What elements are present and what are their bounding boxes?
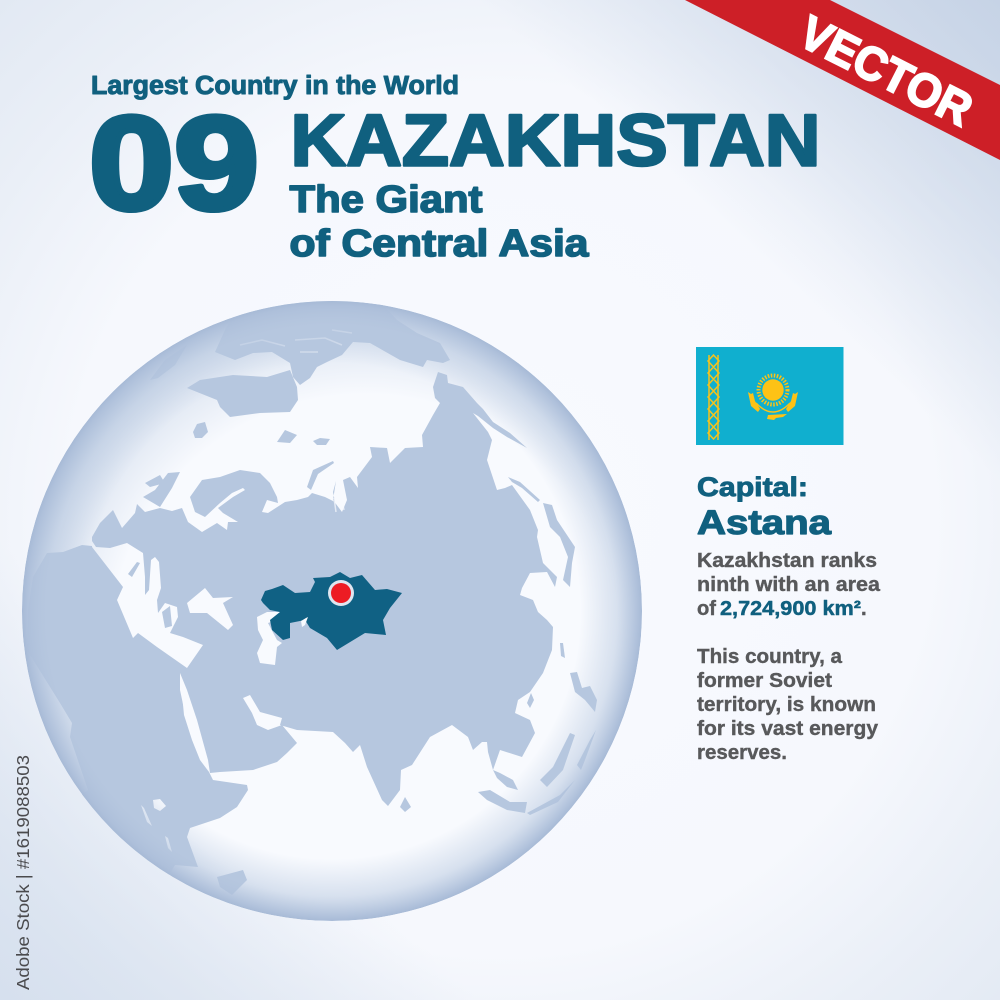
area text: Kazakhstan ranks xyxy=(697,549,877,572)
Novaya Zemlya xyxy=(307,461,334,490)
Madagascar xyxy=(217,870,247,895)
flag of Kazakhstan xyxy=(696,347,844,445)
Caspian xyxy=(257,612,282,665)
inland seas xyxy=(92,541,282,852)
ocean xyxy=(188,824,222,852)
Borneo xyxy=(540,733,575,787)
rank number: 09 xyxy=(89,90,259,238)
side credit text: Adobe Stock | #1619088503 xyxy=(13,755,33,990)
Aral Sea xyxy=(301,617,308,627)
description text: former Soviet xyxy=(697,669,832,692)
subtitle: The Giant xyxy=(290,179,483,221)
African lakes xyxy=(141,799,172,852)
area text: . xyxy=(861,597,867,620)
globe xyxy=(22,295,642,921)
Iceland xyxy=(193,422,208,438)
ribbon: vector xyxy=(685,0,1000,160)
subtitle xyxy=(290,179,589,265)
islands in Mediterranean xyxy=(128,562,172,628)
Eurasia and Africa xyxy=(27,372,557,890)
British Isles xyxy=(143,472,180,507)
country name: KAZAKHSTAN xyxy=(290,100,820,182)
Franz Josef islands xyxy=(313,438,330,445)
Mediterranean xyxy=(92,541,203,668)
description text: territory, is known xyxy=(697,693,876,716)
area text: ninth with an area xyxy=(697,573,881,596)
Sumatra xyxy=(478,790,527,813)
Celebes xyxy=(577,730,596,770)
capital name: Astana xyxy=(697,504,832,542)
description text: for its vast energy xyxy=(697,717,879,740)
area text xyxy=(697,549,881,620)
area text: 2,724,900 km² xyxy=(720,597,861,620)
rim shading xyxy=(22,301,642,921)
flag sun and eagle xyxy=(748,376,798,420)
flag ornament xyxy=(708,355,719,440)
northern lands xyxy=(215,295,450,385)
title block xyxy=(89,72,820,265)
info panel xyxy=(697,472,881,764)
eyebrow heading: Largest Country in the World xyxy=(91,72,459,100)
Arctic channels xyxy=(240,330,352,512)
Sri Lanka xyxy=(400,797,411,812)
landmasses xyxy=(27,295,597,895)
Taiwan xyxy=(560,643,565,658)
Java and Timor arc xyxy=(527,780,575,815)
description text: reserves. xyxy=(697,741,787,764)
Svalbard xyxy=(277,430,297,443)
description text xyxy=(697,645,879,764)
Hainan xyxy=(527,693,534,708)
description text: This country, a xyxy=(697,645,843,668)
subtitle: of Central Asia xyxy=(290,223,589,265)
Sakhalin and Kuril arc xyxy=(508,477,540,502)
area text: of xyxy=(697,597,716,620)
Philippines xyxy=(570,672,597,712)
ribbon: vector: VECTOR xyxy=(791,5,981,136)
Black Sea xyxy=(187,588,233,630)
capital marker xyxy=(328,580,354,606)
Malay peninsula tip xyxy=(493,770,518,790)
capital label: Capital: xyxy=(697,472,808,502)
Japan xyxy=(543,503,575,587)
Kazakhstan xyxy=(261,572,402,650)
Greenland xyxy=(187,370,298,417)
Alaska strip xyxy=(151,360,178,380)
Red Sea xyxy=(182,702,208,772)
